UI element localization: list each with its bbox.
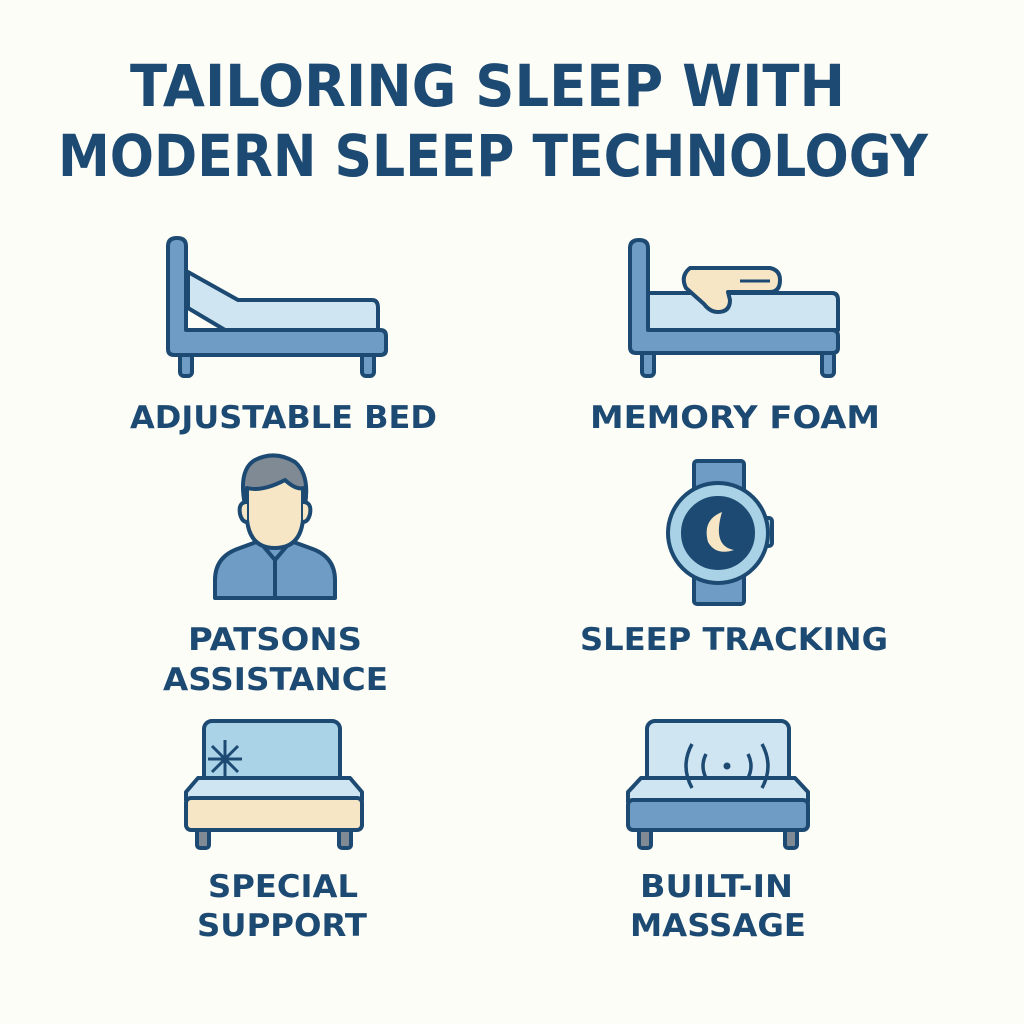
- label: patsons assistance: PATSONS: [188, 622, 362, 658]
- icon: sleep tracking watch: [668, 461, 772, 604]
- label: special support: SUPPORT: [197, 908, 367, 944]
- icon: memory foam: [630, 240, 838, 376]
- label: built-in massage: MASSAGE: [630, 908, 806, 944]
- label: memory foam: MEMORY FOAM: [590, 400, 880, 436]
- title: MODERN SLEEP TECHNOLOGY: [58, 122, 929, 190]
- icon: special support couch: [186, 721, 362, 848]
- title: TAILORING SLEEP WITH: [130, 52, 845, 120]
- label: built-in massage: [630, 869, 806, 944]
- label: special support: [197, 869, 367, 944]
- icon: built-in massage couch: [628, 721, 808, 848]
- icon: adjustable bed: [168, 238, 386, 376]
- label: built-in massage: BUILT-IN: [640, 869, 793, 905]
- label: adjustable bed: ADJUSTABLE BED: [130, 400, 437, 436]
- icon: person: [215, 455, 335, 598]
- label: patsons assistance: ASSISTANCE: [163, 662, 388, 698]
- label: sleep tracking: SLEEP TRACKING: [580, 622, 888, 658]
- label: special support: SPECIAL: [208, 869, 358, 905]
- title: [58, 52, 929, 190]
- label: patsons assistance: [163, 622, 388, 698]
